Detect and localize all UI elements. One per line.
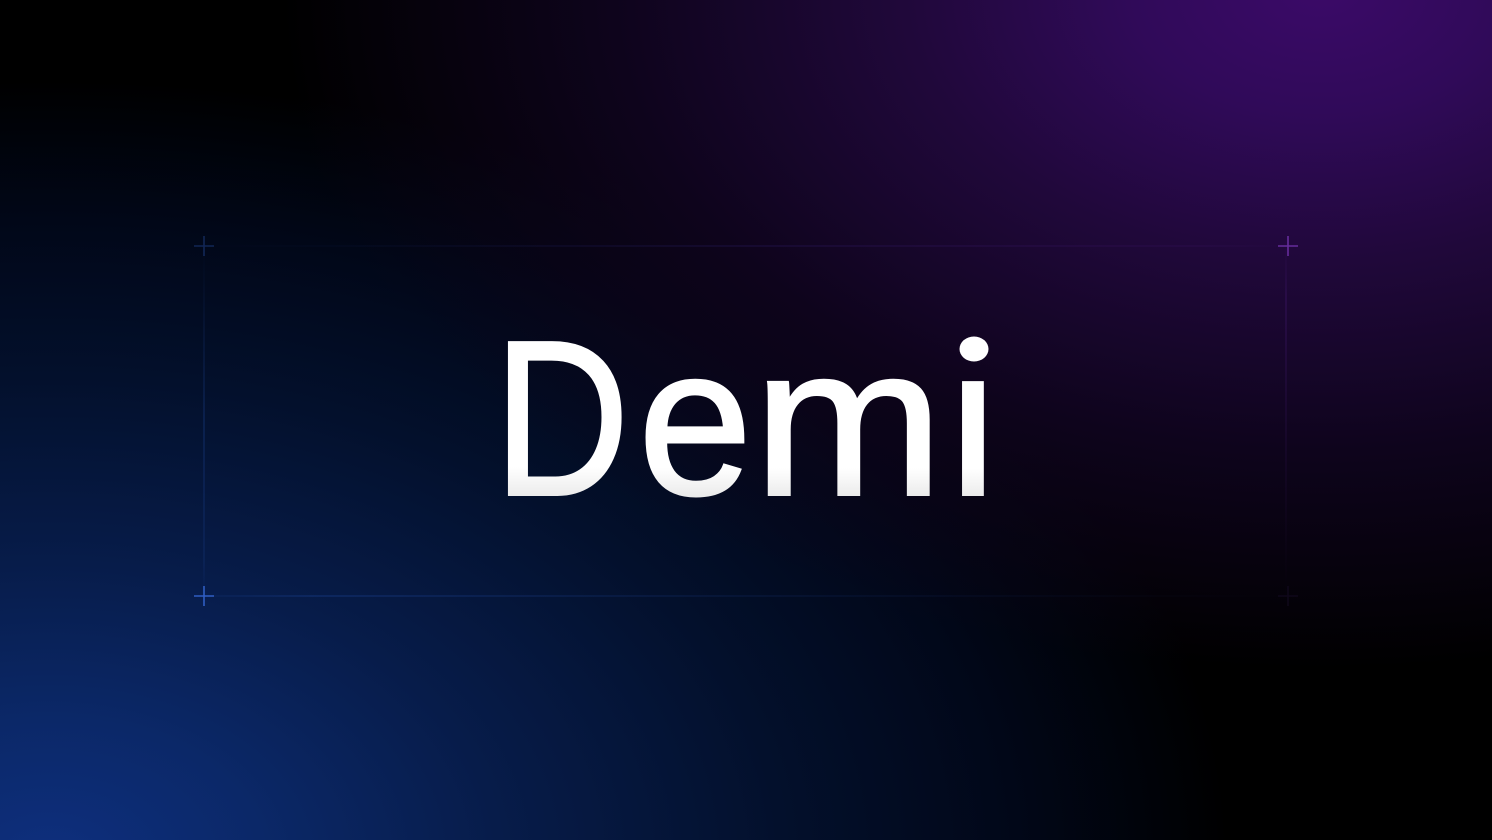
corner cross: top right	[1278, 236, 1298, 256]
title	[508, 336, 988, 498]
title: D	[494, 296, 629, 542]
frame line: right	[1286, 246, 1287, 596]
corner cross: bottom right	[1278, 586, 1298, 606]
frame and title	[194, 236, 1298, 606]
title: i	[948, 301, 998, 541]
frame line: top	[204, 246, 1288, 247]
title: m	[754, 303, 943, 540]
frame line: left	[204, 246, 205, 596]
title: e	[638, 304, 752, 540]
corner cross: top left	[194, 236, 214, 256]
frame line: bottom	[204, 596, 1288, 597]
corner cross: bottom left	[194, 586, 214, 606]
